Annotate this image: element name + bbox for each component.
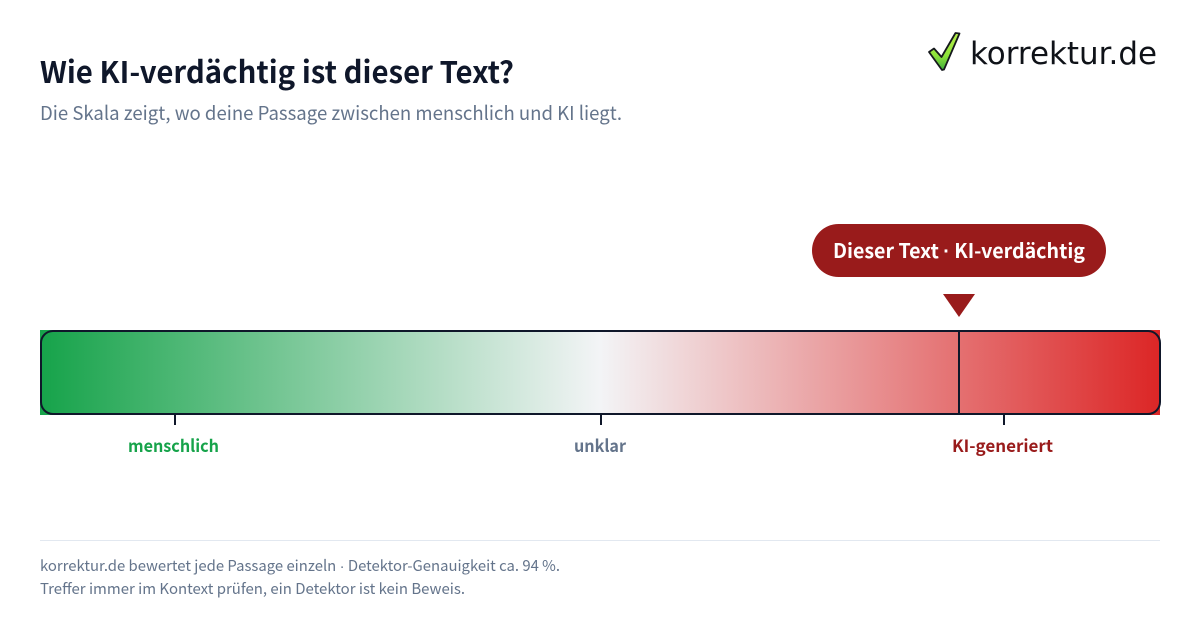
tick: menschlich — [174, 415, 176, 425]
callout: verdict pill: Dieser Text · KI-verdächtig — [833, 235, 1085, 264]
tick: KI-generiert — [1003, 415, 1005, 425]
footer note: korrektur.de bewertet jede Passage einzeln · Detektor-Genauigkeit ca. 94 %. — [40, 555, 560, 576]
arrow: marker triangle — [943, 294, 975, 317]
label: KI-generiert: KI-generiert — [952, 432, 1053, 457]
label: unklar: unklar — [574, 432, 627, 457]
tick: unklar — [600, 415, 602, 425]
footer note: Treffer immer im Kontext prüfen, ein Detektor ist kein Beweis. — [40, 578, 465, 599]
logo: korrektur.de — [929, 33, 1157, 72]
icon: check mark — [929, 33, 960, 70]
footer note — [40, 555, 560, 599]
scale bar — [40, 330, 1160, 415]
title: Wie KI-verdächtig ist dieser Text? — [40, 48, 514, 92]
label: menschlich: menschlich — [128, 432, 219, 457]
callout: verdict pill — [812, 224, 1106, 277]
marker line — [958, 331, 960, 414]
logo wordmark: korrektur.de — [970, 36, 1157, 72]
subtitle: Die Skala zeigt, wo deine Passage zwischen menschlich und KI liegt. — [40, 99, 622, 126]
